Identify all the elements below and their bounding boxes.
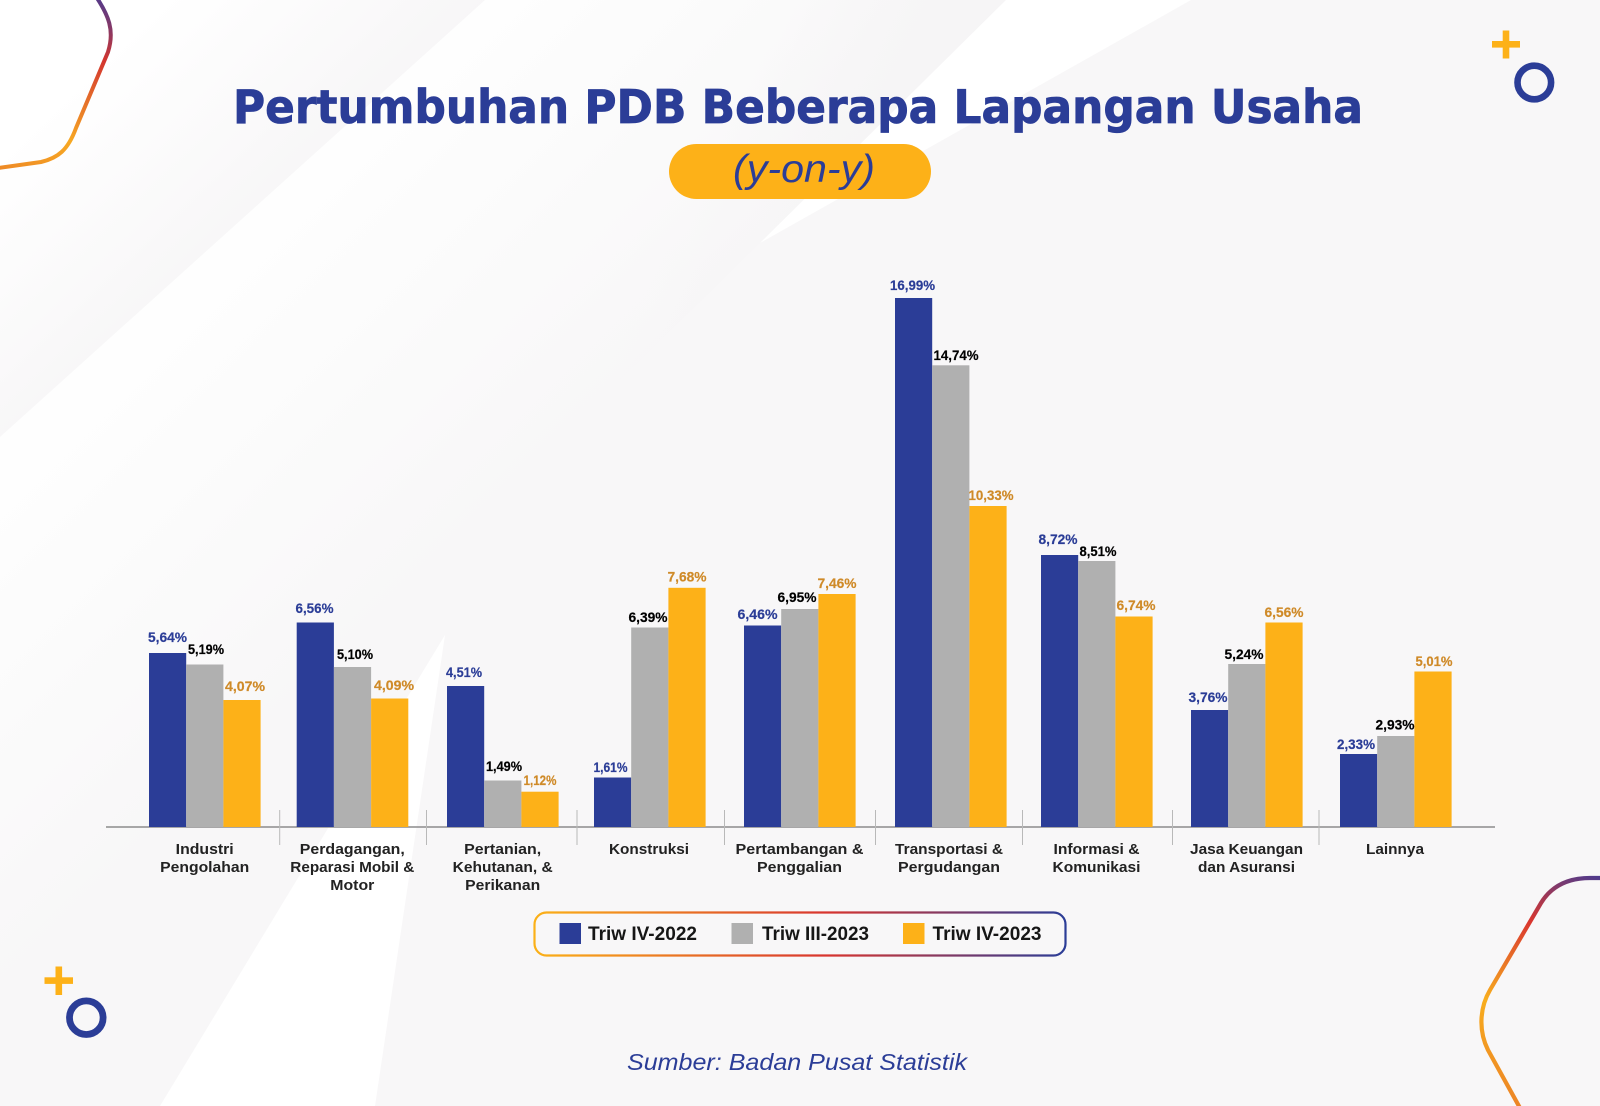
group: Informasi & Komunikasi: 8,72%: [1038, 531, 1078, 547]
group: Pertambangan & Penggalian: Penggalian: [757, 859, 842, 876]
decorative curve: top left: [0, 0, 111, 168]
group: Transportasi & Pergudangan: 10,33%: [968, 487, 1014, 503]
x axis: [106, 810, 1495, 845]
group: Pertambangan & Penggalian: [736, 575, 864, 876]
group: Pertanian, Kehutanan, & Perikanan: [446, 664, 559, 894]
group: Lainnya: 2,93%: [1376, 716, 1415, 732]
group: Transportasi & Pergudangan: 16,99%: [890, 277, 936, 293]
group: Lainnya: [1337, 653, 1453, 858]
group: Jasa Keuangan dan Asuransi: dan Asuransi: [1198, 859, 1295, 876]
group: Perdagangan, Reparasi Mobil & Motor: 5,10%: [337, 646, 373, 662]
legend: [534, 912, 1066, 956]
group: Industri Pengolahan: 5,19%: [188, 641, 224, 657]
group: Pertanian, Kehutanan, & Perikanan: 1,12%: [524, 772, 557, 788]
group: Konstruksi: [594, 568, 707, 858]
group: Industri Pengolahan: [148, 629, 266, 876]
group: Industri Pengolahan: Industri: [176, 841, 234, 858]
group: Lainnya: 2,33%: [1337, 736, 1376, 752]
group: Pertanian, Kehutanan, & Perikanan: Pertanian,: [464, 841, 541, 858]
group: Transportasi & Pergudangan: [890, 277, 1014, 876]
group: Perdagangan, Reparasi Mobil & Motor: Perdagangan,: [300, 841, 405, 858]
group: Informasi & Komunikasi: Komunikasi: [1052, 859, 1140, 876]
group: Pertambangan & Penggalian: 6,95%: [778, 589, 817, 605]
group: Transportasi & Pergudangan: Transportasi &: [895, 841, 1003, 858]
source note: Sumber: Badan Pusat Statistik: [627, 1049, 969, 1075]
group: Lainnya: 5,01%: [1416, 653, 1453, 669]
group: Perdagangan, Reparasi Mobil & Motor: 6,56%: [296, 600, 334, 616]
group: Pertambangan & Penggalian: 7,46%: [818, 575, 857, 591]
group: Perdagangan, Reparasi Mobil & Motor: Reparasi Mobil &: [290, 859, 414, 876]
subtitle pill: (y-on-y): [733, 148, 875, 191]
group: Perdagangan, Reparasi Mobil & Motor: Motor: [330, 877, 374, 894]
group: Lainnya: Lainnya: [1366, 841, 1425, 858]
group: Industri Pengolahan: Pengolahan: [160, 859, 249, 876]
group: Konstruksi: Konstruksi: [609, 841, 689, 858]
icon: plus and ring top right: [1492, 30, 1551, 99]
group: Konstruksi: 7,68%: [668, 568, 707, 584]
group: Pertambangan & Penggalian: 6,46%: [738, 606, 778, 622]
legend item: Triw IV-2023: Triw IV-2023: [932, 923, 1042, 945]
group: Pertambangan & Penggalian: Pertambangan &: [736, 841, 864, 858]
group: Jasa Keuangan dan Asuransi: [1188, 604, 1304, 876]
group: Pertanian, Kehutanan, & Perikanan: Perikanan: [465, 877, 540, 894]
group: Pertanian, Kehutanan, & Perikanan: 1,49%: [486, 758, 522, 774]
subtitle pill: [669, 144, 931, 199]
title: Pertumbuhan PDB Beberapa Lapangan Usaha: [233, 80, 1363, 134]
legend item: Triw IV-2022: Triw IV-2022: [588, 923, 697, 945]
bar chart: [106, 277, 1495, 894]
decorative curve: bottom right: [1481, 878, 1600, 1106]
group: Konstruksi: 6,39%: [628, 609, 668, 625]
group: Jasa Keuangan dan Asuransi: 3,76%: [1188, 689, 1228, 705]
group: Perdagangan, Reparasi Mobil & Motor: [290, 600, 415, 894]
group: Pertanian, Kehutanan, & Perikanan: 4,51%: [446, 664, 482, 680]
group: Konstruksi: 1,61%: [594, 759, 628, 775]
group: Transportasi & Pergudangan: 14,74%: [934, 347, 979, 363]
group: Informasi & Komunikasi: [1038, 531, 1156, 876]
group: Jasa Keuangan dan Asuransi: Jasa Keuangan: [1190, 841, 1303, 858]
group: Informasi & Komunikasi: Informasi &: [1054, 841, 1140, 858]
group: Informasi & Komunikasi: 6,74%: [1116, 597, 1156, 613]
group: Pertanian, Kehutanan, & Perikanan: Kehutanan, &: [453, 859, 553, 876]
icon: plus and ring bottom left: [44, 966, 103, 1034]
group: Industri Pengolahan: 4,07%: [225, 678, 266, 694]
group: Transportasi & Pergudangan: Pergudangan: [898, 859, 1000, 876]
legend item: Triw III-2023: Triw III-2023: [762, 923, 869, 945]
group: Perdagangan, Reparasi Mobil & Motor: 4,09%: [374, 677, 415, 693]
group: Jasa Keuangan dan Asuransi: 5,24%: [1224, 646, 1264, 662]
group: Jasa Keuangan dan Asuransi: 6,56%: [1264, 604, 1304, 620]
group: Industri Pengolahan: 5,64%: [148, 629, 188, 645]
group: Informasi & Komunikasi: 8,51%: [1080, 543, 1117, 559]
